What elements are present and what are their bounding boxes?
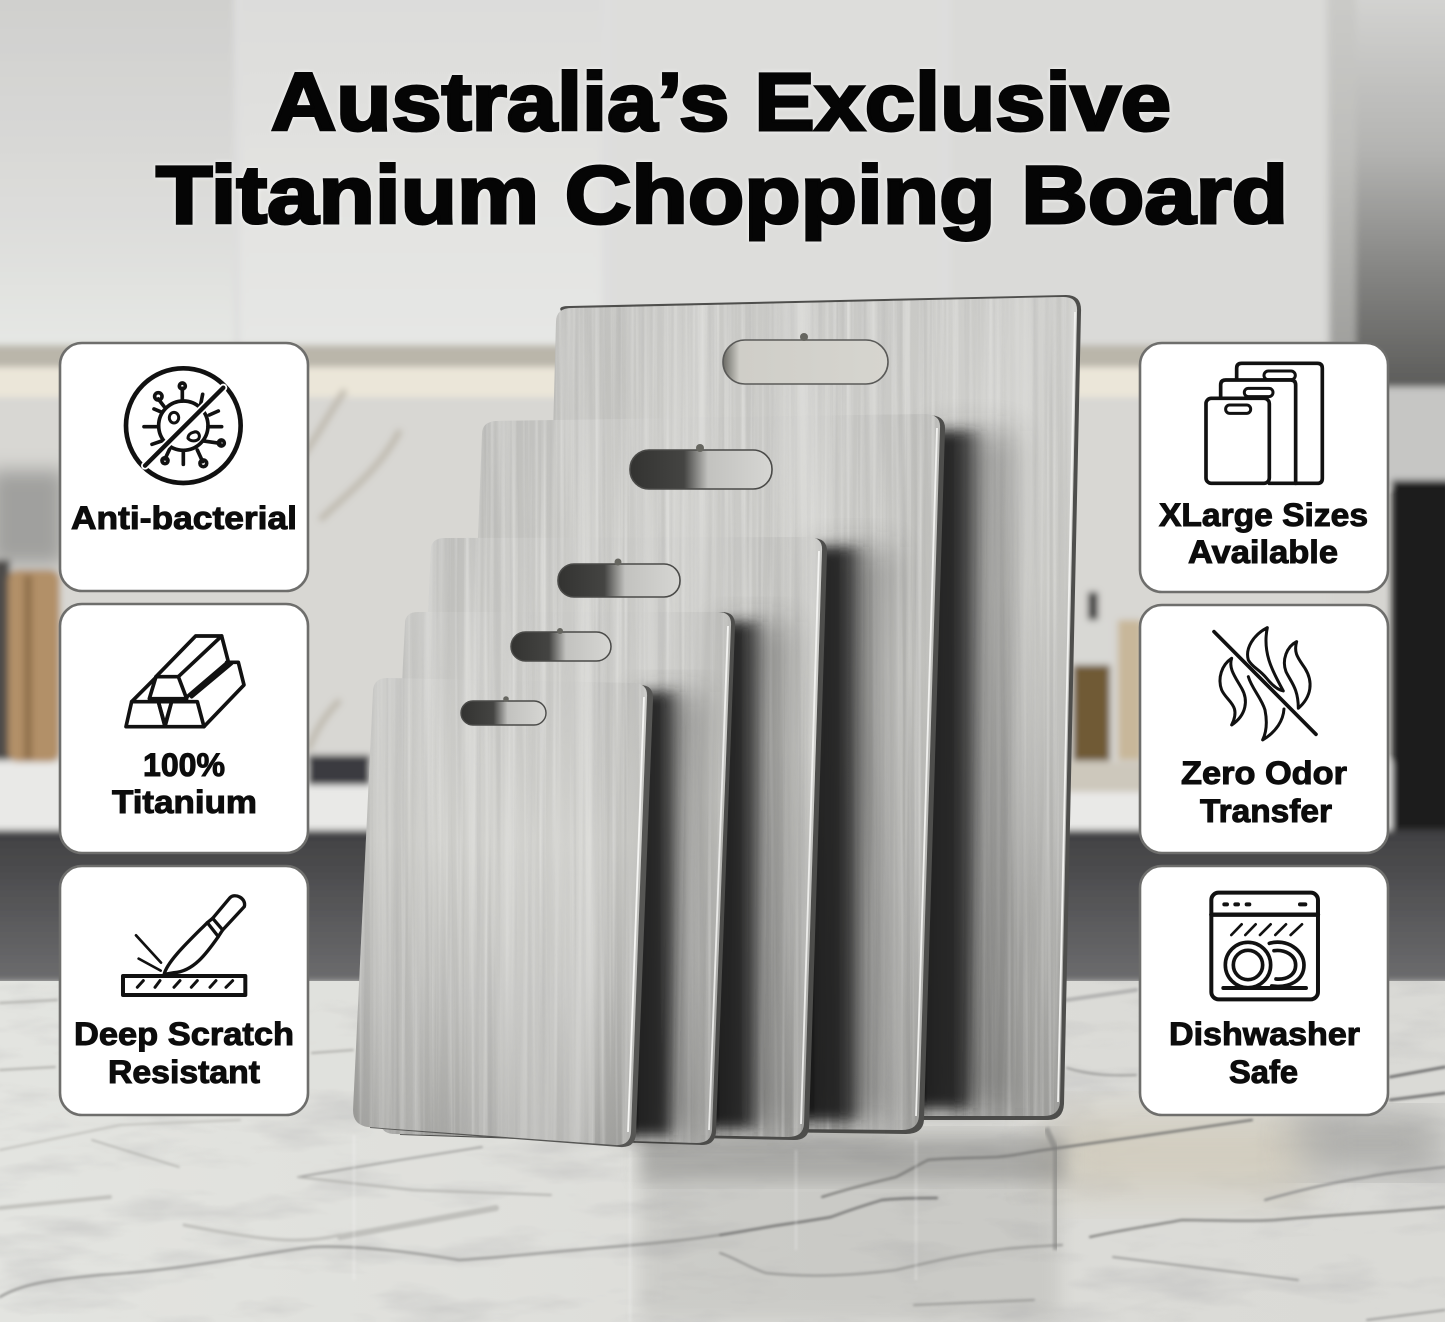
reflection of boards on the counter bbox=[354, 1128, 1065, 1322]
marble counter bbox=[0, 981, 1445, 1322]
icon: knife scratching a board bbox=[123, 896, 245, 995]
label bbox=[1181, 755, 1347, 829]
label: XLarge Sizes bbox=[1159, 497, 1368, 533]
label: Anti-bacterial bbox=[71, 500, 297, 536]
label bbox=[1159, 497, 1368, 570]
handle hole bbox=[723, 333, 888, 384]
icon: dishwasher bbox=[1211, 893, 1318, 999]
icon: crossed-out flames bbox=[1214, 628, 1316, 740]
icon: nested boards bbox=[1206, 363, 1322, 483]
panel: anti-bacterial bbox=[60, 343, 308, 591]
label: 100% bbox=[143, 747, 225, 783]
shadow on board 3 bbox=[702, 622, 790, 1128]
panel: zero odor transfer bbox=[1140, 605, 1388, 853]
boards: five stacked titanium chopping boards bbox=[353, 295, 1081, 1147]
appliance right bbox=[1392, 480, 1445, 830]
title bbox=[156, 57, 1288, 241]
counter back bbox=[0, 755, 1392, 832]
shadow on board 4 bbox=[795, 547, 895, 1120]
wooden utensils left bbox=[0, 470, 65, 762]
board 2 bbox=[380, 612, 735, 1145]
board 1 smallest bbox=[353, 678, 653, 1147]
marble backsplash bbox=[0, 345, 1445, 765]
handle hole bbox=[461, 696, 546, 725]
label: Transfer bbox=[1200, 793, 1332, 829]
label: Safe bbox=[1229, 1054, 1298, 1090]
handle hole bbox=[511, 628, 611, 661]
label bbox=[112, 747, 257, 820]
icon: titanium ingots bbox=[126, 636, 244, 727]
panel: deep scratch resistant bbox=[60, 866, 308, 1115]
board 5 largest bbox=[535, 295, 1081, 1120]
title: Australia’s Exclusive bbox=[271, 57, 1171, 148]
label: Titanium bbox=[112, 784, 257, 820]
label bbox=[74, 1016, 294, 1090]
upper cabinets bbox=[0, 0, 1445, 387]
panel: xlarge sizes bbox=[1140, 343, 1388, 592]
label: Deep Scratch bbox=[74, 1016, 294, 1052]
panel: 100% titanium bbox=[60, 604, 308, 853]
label: Resistant bbox=[108, 1054, 260, 1090]
handle hole bbox=[630, 444, 772, 489]
label: Available bbox=[1188, 534, 1338, 570]
lower cabinets bbox=[0, 830, 1445, 982]
panel: dishwasher safe bbox=[1140, 866, 1388, 1115]
title: Titanium Chopping Board bbox=[156, 150, 1288, 241]
board 3 bbox=[405, 537, 827, 1140]
shadow on board 2 bbox=[622, 692, 705, 1135]
label bbox=[1169, 1016, 1360, 1090]
label: Zero Odor bbox=[1181, 755, 1347, 791]
icon: crossed-out virus bbox=[126, 368, 241, 483]
shadow on largest board bbox=[905, 431, 1015, 1108]
handle hole bbox=[558, 558, 680, 597]
bottle right bbox=[1073, 592, 1142, 761]
label: Dishwasher bbox=[1169, 1016, 1360, 1052]
board 4 bbox=[456, 414, 945, 1134]
